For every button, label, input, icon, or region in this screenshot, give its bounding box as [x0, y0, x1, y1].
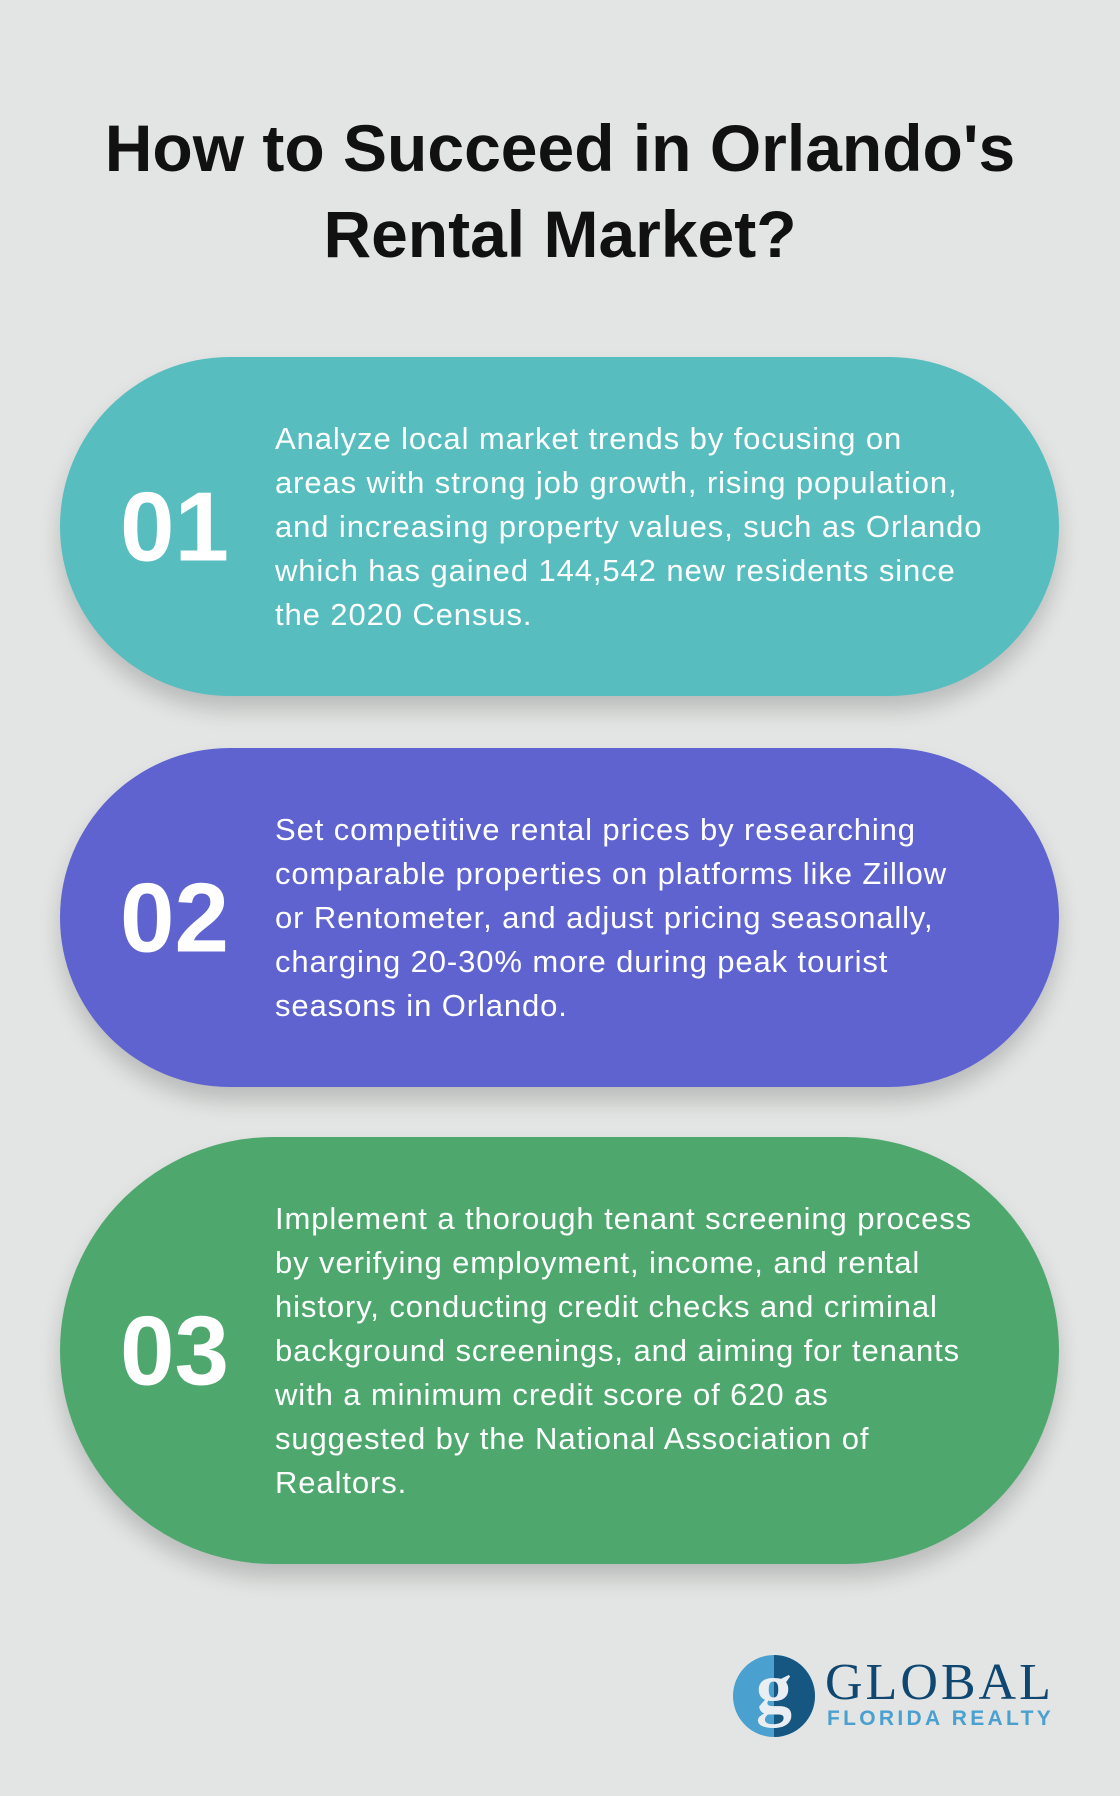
text 01: and increasing property values, such as Orlando — [275, 509, 982, 544]
text 03: with a minimum credit score of 620 as — [275, 1377, 829, 1412]
text 03: history, conducting credit checks and criminal — [275, 1289, 938, 1324]
text 03: by verifying employment, income, and rental — [275, 1245, 920, 1280]
text 03: Implement a thorough tenant screening process — [275, 1201, 972, 1236]
title: How to Succeed in Orlando's — [105, 111, 1015, 185]
text 03: suggested by the National Association of — [275, 1421, 869, 1456]
title: Rental Market? — [323, 197, 797, 271]
text 01: areas with strong job growth, rising population, — [275, 465, 958, 500]
text 03: background screenings, and aiming for tenants — [275, 1333, 960, 1368]
text 02: or Rentometer, and adjust pricing seasonally, — [275, 900, 934, 935]
text 01 — [275, 421, 982, 632]
logo text FLORIDA REALTY: FLORIDA REALTY — [827, 1707, 1054, 1730]
text 02: charging 20-30% more during peak tourist — [275, 944, 888, 979]
text 01: which has gained 144,542 new residents since — [275, 553, 956, 588]
title — [105, 111, 1015, 271]
number 01: 01 — [120, 472, 229, 582]
panel: 03 — [60, 1137, 1059, 1564]
panel: 02 — [60, 748, 1059, 1087]
logo — [733, 1652, 1054, 1737]
text 01: Analyze local market trends by focusing on — [275, 421, 902, 456]
panel: 01 — [60, 357, 1059, 696]
text 02: comparable properties on platforms like Zillow — [275, 856, 947, 891]
text 03 — [275, 1201, 972, 1500]
number 02: 02 — [120, 862, 229, 972]
text 03: Realtors. — [275, 1465, 407, 1500]
text 02: seasons in Orlando. — [275, 988, 568, 1023]
text 01: the 2020 Census. — [275, 597, 532, 632]
text 02: Set competitive rental prices by researching — [275, 812, 916, 847]
text 02 — [275, 812, 947, 1023]
logo text GLOBAL: GLOBAL — [825, 1654, 1054, 1711]
number 03: 03 — [120, 1296, 229, 1406]
icon: g circle — [733, 1652, 815, 1737]
